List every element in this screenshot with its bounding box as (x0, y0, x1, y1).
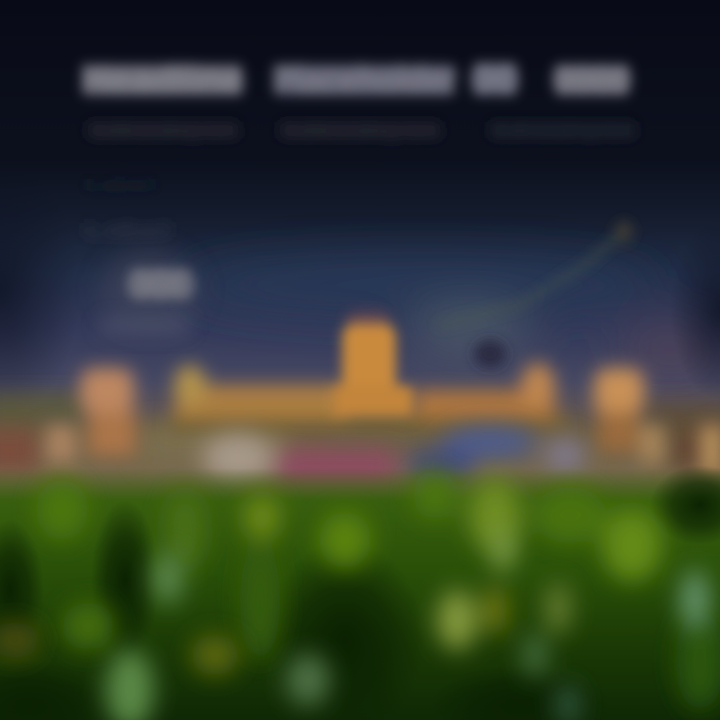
highlighted stat blob (placeholder wording): 000 (128, 264, 194, 305)
faint trend line (440, 220, 634, 325)
title (placeholder wording: the reference is illegible): 0000 (552, 58, 632, 102)
sky glow (180, 255, 720, 380)
subtitle row (placeholder wording) (88, 122, 636, 141)
left column labels (placeholder wording) (85, 177, 170, 242)
flower beds (202, 426, 585, 484)
central tower (332, 310, 414, 417)
subtitle row (placeholder wording): Subheading text (490, 124, 636, 141)
highlighted stat blob (placeholder wording) (100, 250, 200, 334)
dark leaf gaps (0, 465, 720, 720)
foliage foreground (0, 465, 720, 720)
palace wings (170, 363, 570, 430)
bright green leaves (36, 471, 720, 710)
foliage base (0, 465, 720, 720)
title (placeholder wording: the reference is illegible): Headline (80, 58, 245, 102)
pale leaves (106, 528, 710, 720)
left column labels (placeholder wording): Label (85, 177, 155, 194)
title (placeholder wording: the reference is illegible): 00 (470, 58, 520, 102)
subtitle row (placeholder wording): Subheading text (88, 124, 239, 141)
right tower (594, 368, 720, 475)
ground haze (0, 398, 720, 470)
left column labels (placeholder wording): Label (85, 220, 170, 242)
palace building (46, 310, 720, 475)
side shading (0, 160, 720, 420)
dark orb (474, 340, 506, 368)
title (placeholder wording: the reference is illegible) (80, 58, 632, 102)
left tower (46, 368, 136, 463)
title (placeholder wording: the reference is illegible): Placeholder (272, 58, 457, 102)
subtitle row (placeholder wording): Subheading text (280, 124, 441, 141)
olive leaves (0, 622, 239, 675)
